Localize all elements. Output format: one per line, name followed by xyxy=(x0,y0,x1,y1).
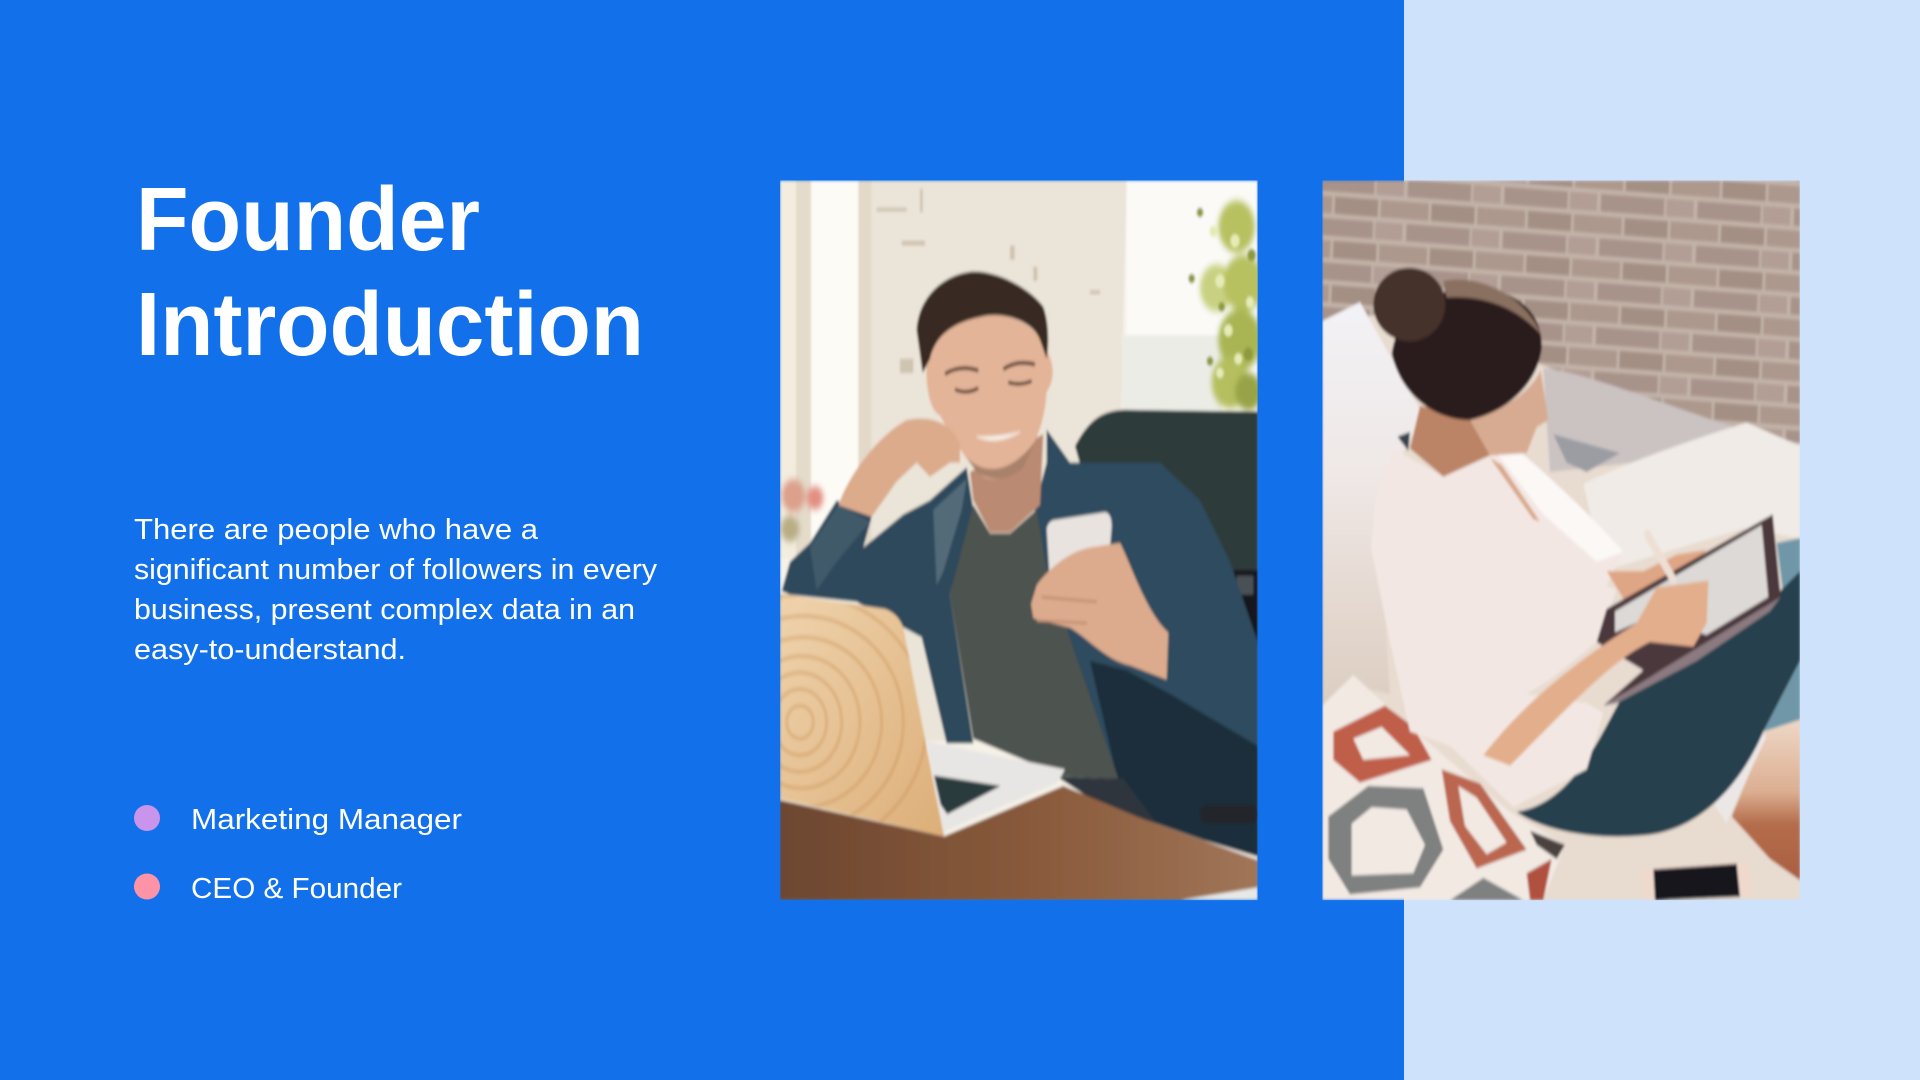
face xyxy=(1470,371,1548,456)
background: light blue panel xyxy=(1404,0,1920,1080)
arm and hand xyxy=(1483,581,1708,766)
title: Founder xyxy=(136,170,480,270)
hand with phone xyxy=(1031,543,1168,680)
hair bun xyxy=(1373,268,1445,341)
phone xyxy=(1047,512,1112,581)
grey couch back xyxy=(1543,368,1800,472)
face xyxy=(926,315,1053,479)
blouse xyxy=(1371,448,1623,807)
role: ceo and founder: CEO & Founder xyxy=(191,873,402,905)
far forearm xyxy=(1607,550,1707,604)
bullet: marketing manager xyxy=(134,805,160,831)
desk xyxy=(780,786,1258,900)
flowers xyxy=(781,479,823,542)
chair xyxy=(1074,408,1258,748)
description text block xyxy=(134,514,658,666)
neck xyxy=(970,434,1043,532)
hair xyxy=(917,271,1048,373)
role: marketing manager: Marketing Manager xyxy=(191,804,462,836)
neck xyxy=(1410,406,1495,477)
light jeans leg xyxy=(1777,538,1800,595)
role list xyxy=(134,804,462,905)
eyes and smile xyxy=(945,363,1035,374)
laptop base xyxy=(927,741,1065,836)
phone on bed xyxy=(1640,861,1754,900)
stylus xyxy=(1647,534,1673,580)
description text block: easy-to-understand. xyxy=(134,634,406,666)
title xyxy=(136,170,644,375)
description text block: There are people who have a xyxy=(134,514,539,546)
background: blue panel xyxy=(0,0,1404,1080)
description text block: significant number of followers in every xyxy=(134,554,658,586)
brick wall xyxy=(1322,180,1800,444)
white blanket xyxy=(1583,422,1800,571)
photo: woman drawing on a tablet xyxy=(1322,180,1800,900)
jeans xyxy=(1517,571,1800,837)
bullet: ceo and founder xyxy=(134,874,160,900)
t-shirt xyxy=(950,505,1118,779)
tablet xyxy=(1597,515,1781,706)
laptop lid xyxy=(780,594,944,836)
white pillow xyxy=(1322,302,1423,706)
title: Introduction xyxy=(136,275,644,375)
laptop lid wood rings xyxy=(780,594,926,822)
description text block: business, present complex data in an xyxy=(134,594,635,626)
hair xyxy=(1392,287,1542,420)
chair arm xyxy=(1200,805,1258,824)
plant xyxy=(1188,201,1263,411)
foot xyxy=(1732,720,1800,880)
photo: man with laptop and phone xyxy=(780,180,1258,900)
patterned cushion xyxy=(1322,675,1565,900)
shirt xyxy=(782,467,973,743)
hand at cheek xyxy=(838,418,960,517)
